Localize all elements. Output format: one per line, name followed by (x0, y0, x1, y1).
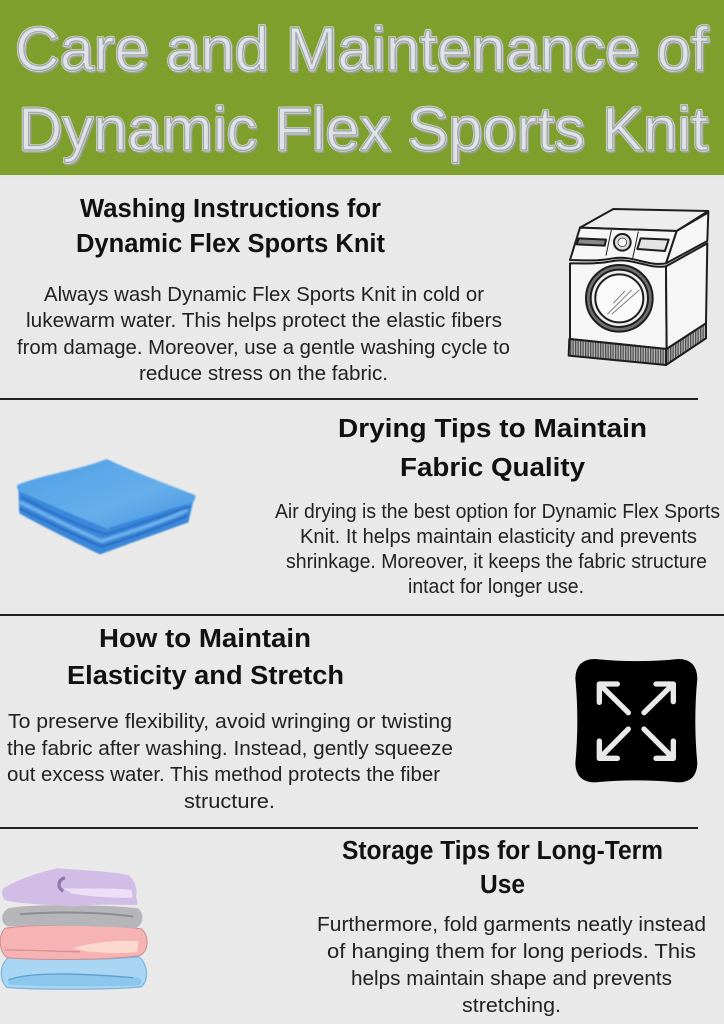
heading: drying: Fabric Quality (400, 454, 586, 482)
heading: storage: Storage Tips for Long-Term (342, 837, 663, 865)
heading: storage: Use (480, 871, 525, 899)
text: elasticity body: structure. (184, 791, 275, 813)
heading: drying: Drying Tips to Maintain (338, 415, 647, 443)
heading: storage (342, 837, 663, 899)
icon: stack of folded clothes (0, 868, 147, 989)
text: storage body: Furthermore, fold garments neatly instead (317, 914, 706, 936)
text: storage body: helps maintain shape and prevents (351, 968, 672, 990)
title (15, 15, 711, 165)
text: drying body: intact for longer use. (408, 576, 584, 598)
panel: drying tips (17, 415, 720, 598)
heading: drying (338, 415, 647, 482)
text: storage body: of hanging them for long periods. This (327, 941, 696, 963)
divider (0, 827, 698, 829)
title: Dynamic Flex Sports Knit (18, 95, 708, 163)
title: Dynamic Flex Sports Knit (18, 95, 708, 163)
text: elasticity body (7, 711, 453, 813)
icon: expand arrows (575, 659, 697, 782)
text: washing body: from damage. Moreover, use a gentle washing cycle to (17, 337, 510, 359)
title: Care and Maintenance of (15, 15, 709, 83)
text: drying body: Knit. It helps maintain elasticity and prevents (300, 526, 697, 548)
panel: washing instructions (17, 195, 708, 385)
icon: folded blue towel (17, 459, 195, 554)
heading: elasticity: Elasticity and Stretch (67, 662, 344, 690)
text: elasticity body: out excess water. This method protects the fiber (7, 764, 440, 786)
text: storage body: stretching. (462, 995, 561, 1017)
text: drying body: shrinkage. Moreover, it keeps the fabric structure (286, 551, 707, 573)
title: Dynamic Flex Sports Knit (20, 97, 710, 165)
heading: washing: Dynamic Flex Sports Knit (76, 230, 386, 258)
text: storage body (317, 914, 706, 1017)
text: washing body: reduce stress on the fabric. (139, 363, 388, 385)
text: elasticity body: the fabric after washing. Instead, gently squeeze (7, 738, 453, 760)
text: drying body: Air drying is the best option for Dynamic Flex Sports (275, 501, 720, 523)
heading: elasticity (67, 625, 344, 690)
text: washing body: Always wash Dynamic Flex Sports Knit in cold or (44, 284, 484, 306)
header banner (0, 0, 724, 177)
divider (0, 614, 724, 616)
panel: storage tips (0, 837, 706, 1017)
text: elasticity body: To preserve flexibility, avoid wringing or twisting (8, 711, 452, 733)
text: washing body: lukewarm water. This helps protect the elastic fibers (26, 310, 502, 332)
text: washing body (17, 284, 510, 385)
heading: washing (76, 195, 386, 258)
heading: elasticity: How to Maintain (99, 625, 311, 653)
title: Care and Maintenance of (15, 15, 709, 83)
title: Care and Maintenance of (16, 17, 711, 85)
heading: washing: Washing Instructions for (80, 195, 381, 223)
panel: elasticity and stretch (7, 625, 697, 813)
divider (0, 398, 698, 400)
icon: washing machine (569, 209, 708, 365)
text: drying body (275, 501, 720, 598)
